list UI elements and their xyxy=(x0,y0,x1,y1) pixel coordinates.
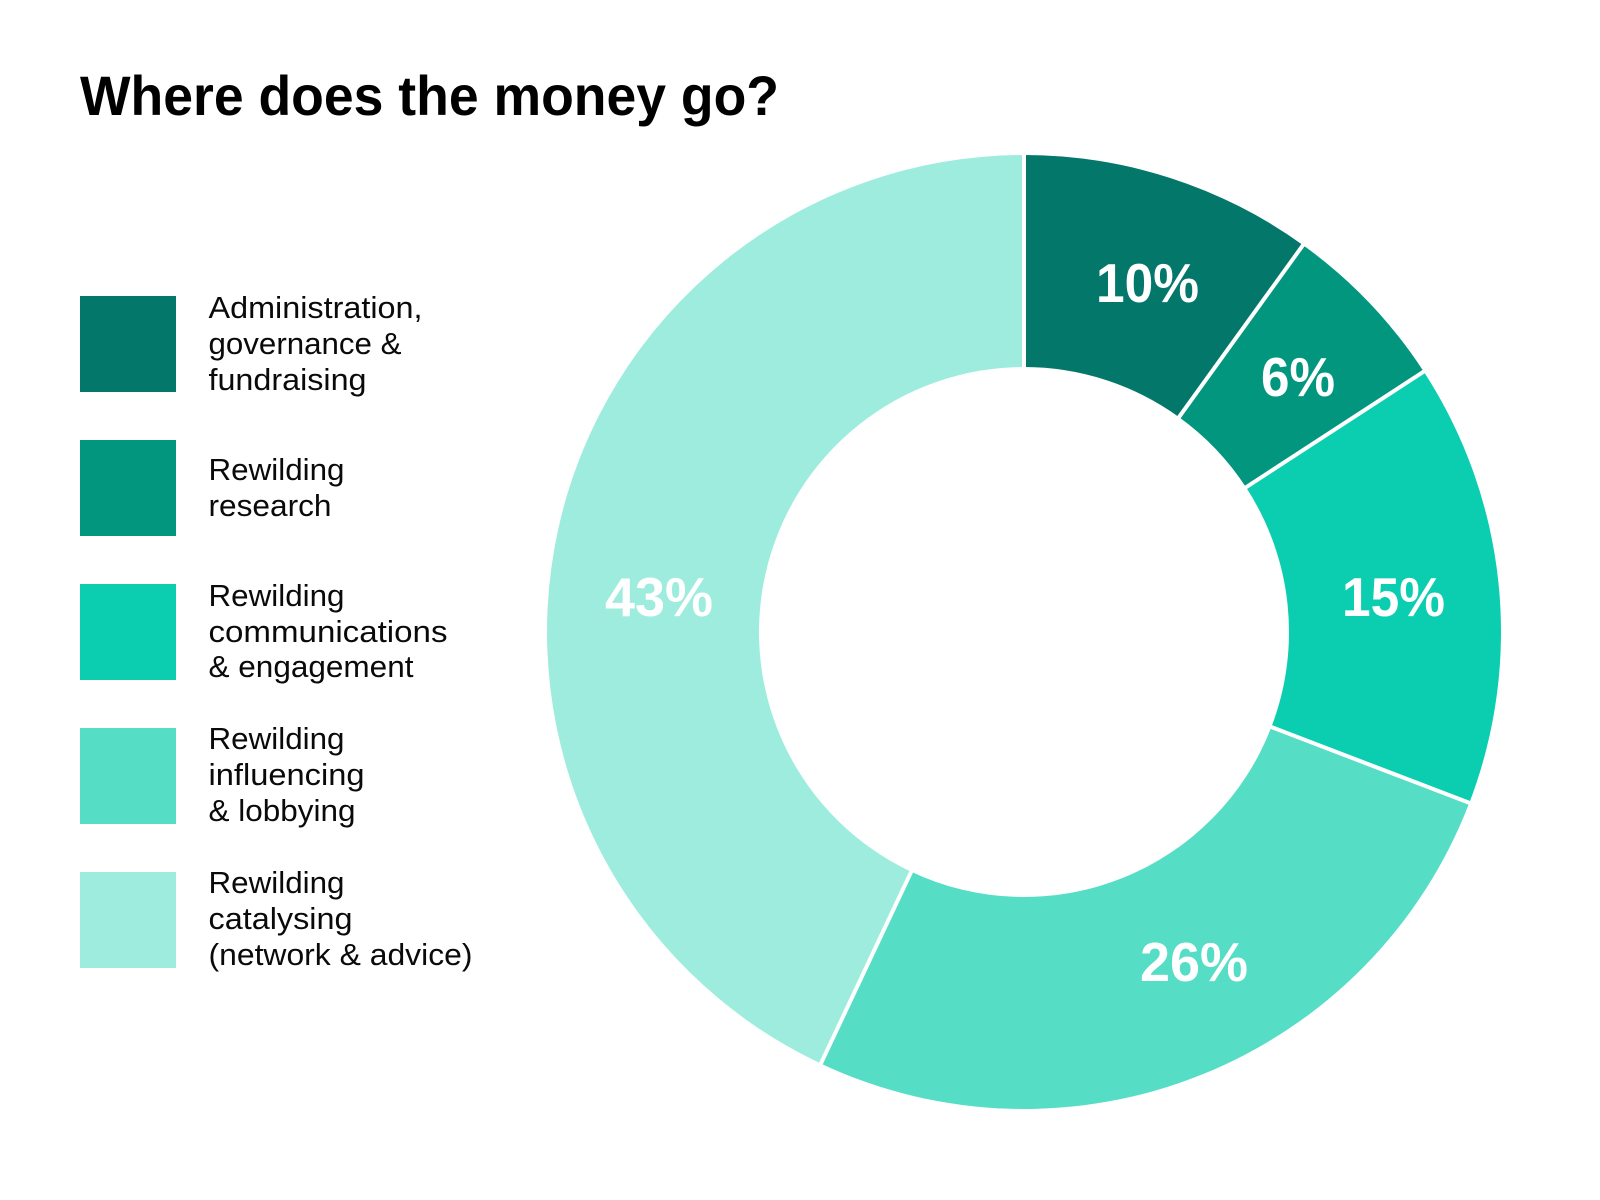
legend item: catalysing: catalysing xyxy=(208,901,352,936)
legend item: catalysing: Rewilding xyxy=(208,865,344,900)
value label: 10%: 10% xyxy=(1096,252,1199,314)
legend item: research: research xyxy=(208,488,332,523)
legend item: influencing: Rewilding xyxy=(208,721,344,756)
legend item: influencing: & lobbying xyxy=(208,793,356,828)
title: Where does the money go? xyxy=(80,64,779,127)
legend item: communications: Rewilding xyxy=(208,578,344,613)
segment: influencing 26% xyxy=(821,727,1469,1109)
legend item: communications xyxy=(80,578,448,684)
legend item: communications: & engagement xyxy=(208,649,414,684)
segment: administration 10% xyxy=(1024,155,1303,417)
value label: 6%: 6% xyxy=(1261,346,1335,408)
donut chart xyxy=(547,151,1501,1109)
legend item: influencing xyxy=(80,721,364,828)
segment: catalysing 43% xyxy=(547,155,1024,1064)
legend item: catalysing: (network & advice) xyxy=(208,937,472,972)
legend item: administration xyxy=(80,290,422,397)
legend item: administration: fundraising xyxy=(208,362,366,397)
legend xyxy=(80,290,472,972)
legend item: catalysing xyxy=(80,865,472,972)
segment: research 6% xyxy=(1179,245,1424,487)
value label: 15%: 15% xyxy=(1342,566,1445,628)
legend item: communications: communications xyxy=(208,614,448,649)
segment separators xyxy=(819,151,1473,1067)
legend item: administration: Administration, xyxy=(208,290,422,325)
segment: communications 15% xyxy=(1246,372,1501,803)
legend item: administration: governance & xyxy=(208,326,402,361)
legend item: research: Rewilding xyxy=(208,452,344,487)
legend item: influencing: influencing xyxy=(208,757,364,792)
value label: 26%: 26% xyxy=(1140,931,1248,993)
value label: 43%: 43% xyxy=(605,566,713,628)
legend item: research xyxy=(80,440,344,536)
